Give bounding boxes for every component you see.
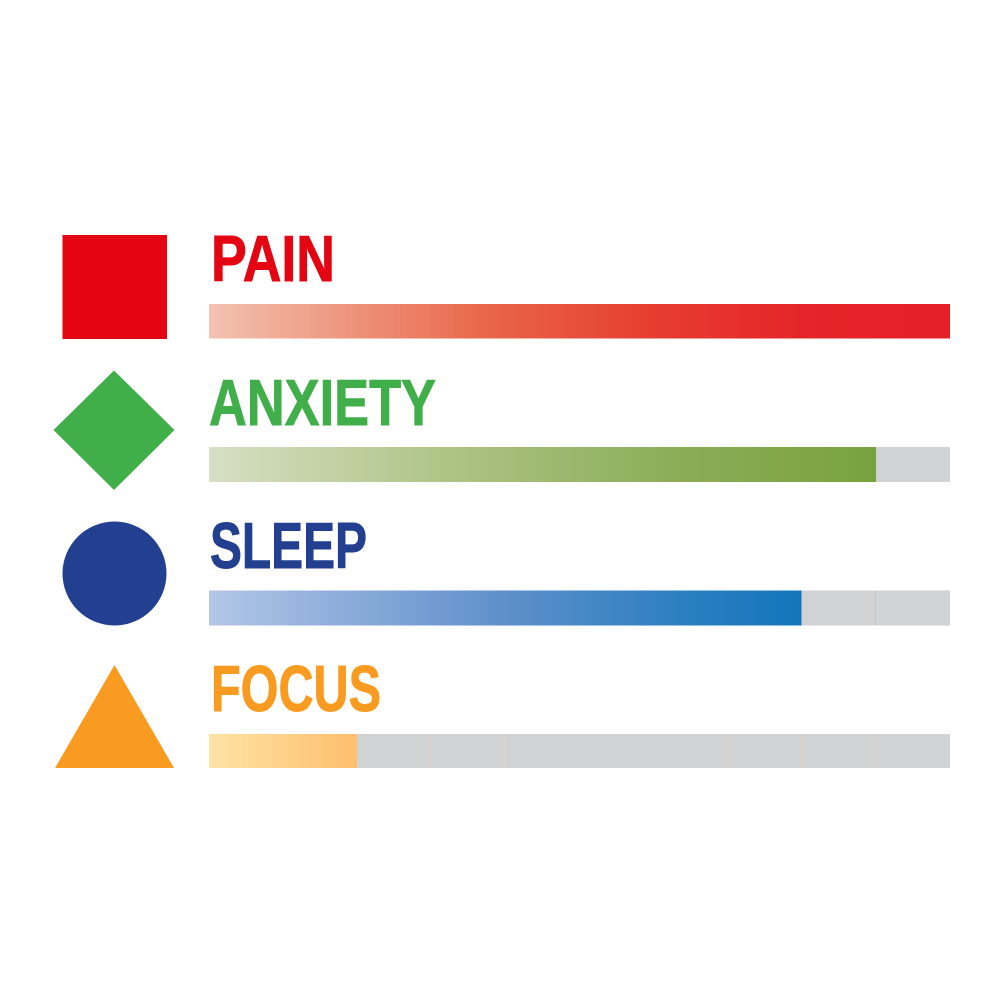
- icon: blue circle: [62, 522, 166, 626]
- icon: red square: [62, 235, 167, 339]
- bar: focus: [209, 734, 950, 768]
- heading: FOCUS: FOCUS: [211, 652, 381, 725]
- icon: green diamond: [54, 370, 174, 490]
- heading: SLEEP: SLEEP: [210, 509, 367, 582]
- icon: orange triangle: [55, 665, 174, 768]
- heading: ANXIETY: ANXIETY: [209, 366, 436, 439]
- heading: PAIN: PAIN: [211, 222, 335, 295]
- bar: sleep: [209, 590, 950, 626]
- bar: pain: [209, 304, 950, 338]
- bar: anxiety: [209, 447, 950, 482]
